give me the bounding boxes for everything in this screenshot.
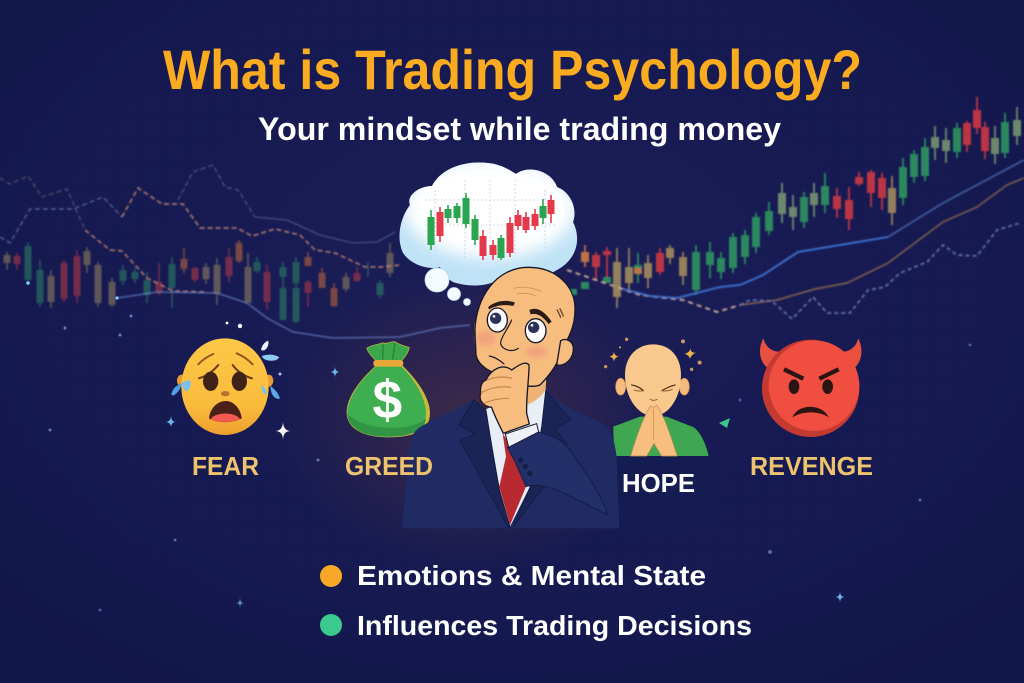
jacket sleeve (507, 432, 608, 515)
icon: angry devil face (760, 338, 861, 437)
hand on chin (480, 363, 529, 433)
mini candlesticks (431, 193, 551, 260)
suit jacket (402, 392, 619, 528)
cheeks (476, 331, 496, 346)
head (475, 267, 575, 386)
chart: moving average lines (0, 160, 1024, 338)
eyebrows (488, 301, 515, 309)
eyes (487, 308, 546, 343)
chart: right candlesticks (573, 97, 1017, 308)
title: What is Trading Psychology? (163, 38, 862, 101)
right ear (557, 340, 573, 365)
cloud grid (425, 180, 555, 260)
shirt (486, 387, 546, 527)
necktie (499, 433, 526, 525)
label: fear: FEAR (192, 451, 259, 481)
lapels (459, 400, 510, 527)
label: revenge: REVENGE (750, 451, 873, 481)
neck (523, 370, 547, 405)
chart: left candlesticks (7, 240, 390, 323)
bullet list (320, 560, 752, 641)
bullet: decisions: Influences Trading Decisions (357, 610, 752, 641)
left ear (474, 316, 482, 340)
subtitle: Your mindset while trading money (258, 111, 781, 147)
sparkles and stars (26, 281, 971, 642)
label: hope: HOPE (622, 468, 695, 498)
thought cloud with candlestick chart (399, 158, 577, 285)
icon: fear face (171, 338, 280, 435)
nose and mouth (489, 320, 518, 364)
thought bubbles (425, 268, 470, 306)
bullet: emotions: Emotions & Mental State (357, 560, 706, 591)
dollar sign: $ (372, 371, 402, 430)
icon: praying person (604, 338, 720, 530)
label: greed: GREED (345, 451, 433, 481)
illustration: thinking man in suit (402, 267, 619, 528)
icon: money bag (347, 342, 430, 437)
shirt cuff (505, 424, 539, 447)
